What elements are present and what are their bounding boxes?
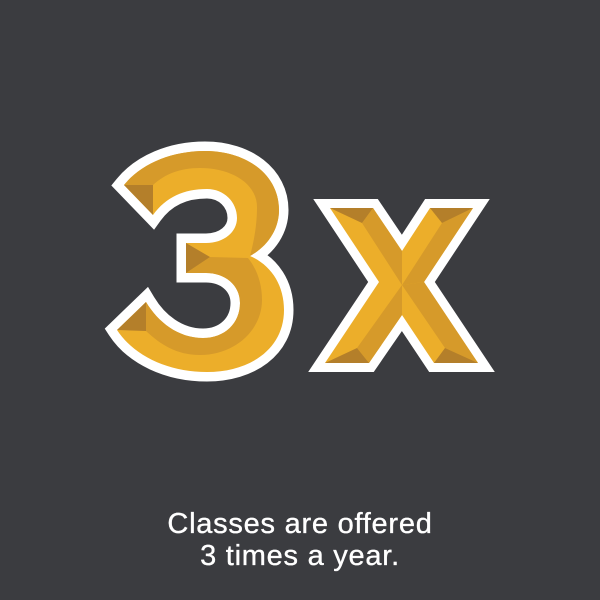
caption [167, 508, 433, 572]
numeral 3 [117, 151, 284, 372]
bottom right facet [434, 348, 478, 363]
lower left dark band [357, 285, 402, 363]
waist facet [186, 243, 210, 273]
caption: Classes are offered [167, 508, 433, 540]
lower right dark band [402, 282, 478, 363]
caption: 3 times a year. [200, 540, 400, 572]
upper dark band [124, 151, 279, 256]
upper left dark band [362, 208, 402, 285]
bottom tip facet [117, 302, 146, 331]
upper right dark band [402, 208, 473, 285]
top tip facet [124, 185, 153, 215]
letter x [325, 208, 478, 363]
lower dark band [146, 257, 262, 355]
top right facet [430, 208, 473, 223]
top left facet [330, 208, 373, 223]
bottom left facet [325, 348, 369, 363]
